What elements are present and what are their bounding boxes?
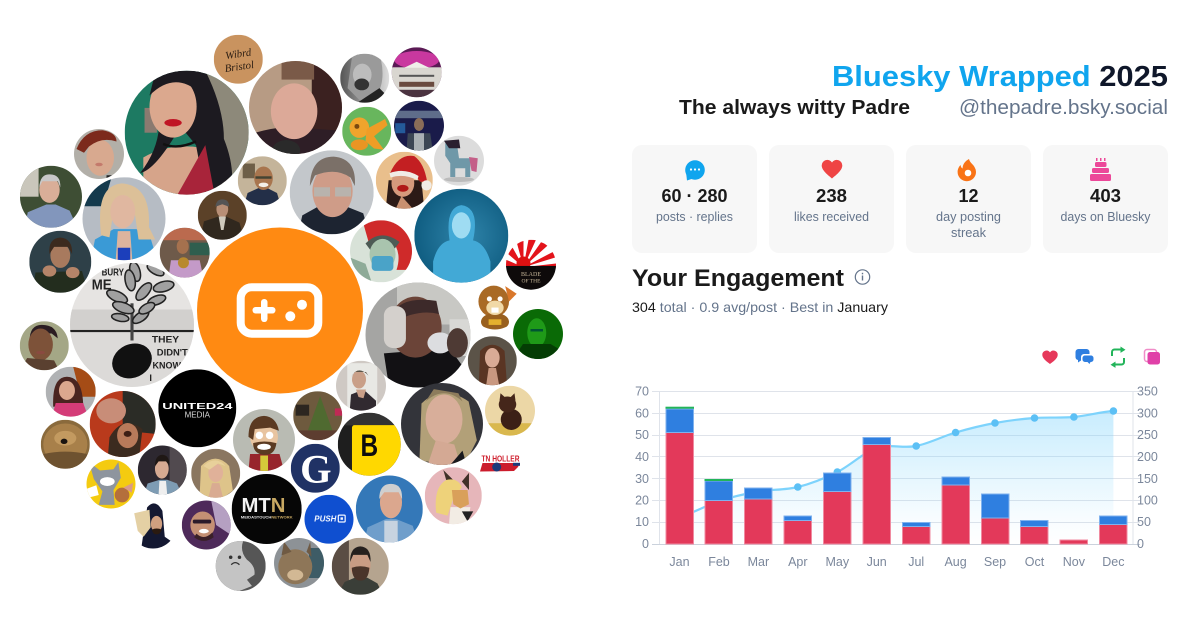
avatar: MeidasTouch Network logo [232, 474, 302, 544]
legend icon: reposts [1110, 346, 1126, 368]
month labels: May [825, 555, 850, 569]
legend icon: quotes [1144, 350, 1160, 364]
month labels: Sep [984, 555, 1006, 569]
right axis labels: 50 [1137, 515, 1151, 529]
avatar: man with headset [366, 282, 470, 388]
center: orange circle with game controller icon [197, 228, 363, 394]
avatar bubble cluster [20, 35, 563, 595]
icon: chat bubble [685, 160, 705, 180]
avatar: United24 Media logo [158, 369, 236, 447]
avatar: Guardian G [291, 444, 340, 493]
avatar: Guardian G: G [300, 447, 332, 492]
avatar: Bury Me potato drawing: THEY [152, 334, 180, 344]
right axis labels [1137, 384, 1158, 551]
avatar: Push Square logo [304, 495, 354, 544]
stat card: posts and replies: posts · replies [656, 210, 733, 224]
cumulative line [680, 411, 1113, 516]
left axis labels: 70 [635, 384, 649, 398]
avatar: blonde woman in blue blazer [82, 177, 166, 260]
avatar: cartoon beaver [478, 286, 517, 330]
cumulative points [794, 407, 1117, 491]
left axis labels: 50 [635, 428, 649, 442]
avatar: man in suit [138, 446, 187, 494]
engagement summary: 304 total · 0.9 avg/post · Best in January [632, 299, 888, 315]
avatar: ghost [216, 541, 266, 591]
gridlines [652, 391, 1140, 544]
avatar: B logo: B [360, 427, 378, 463]
avatar: United24 Media logo: UNITED24 [162, 402, 233, 411]
avatar: Bury Me potato drawing: KNOW [152, 360, 181, 370]
stat card: posting streak: 12 [958, 186, 978, 206]
avatar: red-haired woman [74, 129, 124, 179]
avatar: Wibrd Bristol: Wibrd [225, 46, 253, 62]
left axis labels: 0 [642, 537, 649, 551]
avatar: TN Holler logo [480, 454, 520, 472]
avatar: Tom and Jerry [86, 460, 136, 508]
left axis labels: 10 [635, 515, 649, 529]
display name: The always witty Padre [679, 97, 910, 119]
right axis labels: 100 [1137, 494, 1158, 508]
avatar: White House [392, 47, 442, 97]
avatar: United24 Media logo: MEDIA [185, 410, 210, 420]
avatar: woman with long brown hair [468, 336, 517, 385]
avatar: TN Holler logo: TN HOLLER [482, 454, 520, 464]
avatar: Blade of the rising sun: OF THE [522, 279, 541, 285]
right axis labels: 150 [1137, 472, 1158, 486]
stat card: posts and replies [632, 145, 757, 253]
month labels: Jun [867, 555, 887, 569]
stat card: days on Bluesky [1043, 145, 1168, 253]
avatar: MeidasTouch Network logo: MEIDASTOUCH NETWORK [241, 515, 293, 519]
right axis labels: 250 [1137, 428, 1158, 442]
right axis labels: 200 [1137, 450, 1158, 464]
avatar: shaggy dog [41, 420, 90, 469]
avatar: woman in black top [336, 361, 386, 411]
avatar: Statue of Liberty with mask [350, 220, 412, 282]
avatar: woman with floral top [46, 367, 96, 417]
month labels: Jan [669, 555, 690, 569]
legend icon: likes [1042, 351, 1058, 364]
avatar: blue hooded figure [414, 189, 508, 283]
avatar: MeidasTouch Network logo: MTN [242, 495, 285, 517]
right axis labels: 0 [1137, 537, 1144, 551]
stacked bars: replies [666, 409, 1127, 526]
month labels: Aug [944, 555, 967, 569]
engagement chart [635, 384, 1158, 569]
stat card: posts and replies: 60 · 280 [662, 186, 728, 206]
avatar: man in dark station [394, 101, 444, 151]
month labels: Oct [1025, 555, 1045, 569]
handle: @thepadre.bsky.social [959, 97, 1168, 119]
stat card: likes received: 238 [816, 186, 847, 206]
avatar: cartoon man with beard [233, 409, 295, 471]
left axis labels: 60 [635, 406, 649, 420]
stat card: likes received: likes received [794, 210, 869, 224]
avatar: Blade of the rising sun: BLADE [521, 272, 541, 278]
avatar: Blade of the rising sun [506, 240, 556, 291]
month labels: Dec [1102, 555, 1125, 569]
avatar: Bury Me potato drawing: DIDN'T [157, 347, 188, 357]
icon: info [855, 270, 870, 284]
avatar: man holding collar [29, 231, 91, 293]
avatar: Christmas tree [293, 391, 342, 440]
stat card: posting streak: streak [951, 226, 987, 240]
cumulative area [680, 411, 1113, 544]
stat card: posting streak [906, 145, 1031, 253]
left axis labels: 20 [635, 494, 649, 508]
stacked bars: likes [666, 432, 1127, 544]
avatar: man with glasses [290, 150, 374, 234]
avatar: green man [513, 309, 563, 359]
icon: cake [1090, 158, 1111, 181]
avatar: smiling older man [20, 166, 82, 228]
avatar: B logo [338, 413, 401, 476]
right axis labels: 350 [1137, 384, 1158, 398]
avatar: man in hat [198, 191, 247, 240]
avatar: man with glasses, purple light [182, 500, 231, 550]
icon: heart [822, 160, 842, 178]
avatar: Wibrd Bristol [214, 35, 263, 84]
avatar: bearded man black and white [340, 54, 389, 103]
avatar: blonde woman [401, 383, 483, 465]
avatar: Wibrd Bristol: Bristol [224, 59, 255, 75]
avatar: man with coconut [160, 228, 210, 278]
avatar: Bury Me potato drawing: ME [92, 278, 112, 294]
avatar: painted black cat [485, 386, 535, 436]
month labels: Mar [748, 555, 769, 569]
avatar: blonde woman smiling [191, 449, 240, 498]
month labels: Nov [1063, 555, 1086, 569]
stacked bars: reposts [666, 407, 733, 481]
avatar: cartoon fox girl [425, 467, 482, 524]
avatar: blurry red selfie [90, 391, 156, 457]
stat card: days on Bluesky: 403 [1090, 186, 1121, 206]
right axis labels: 300 [1137, 406, 1158, 420]
avatar: Bury Me potato drawing: BURY [102, 267, 124, 278]
avatar: Bury Me potato drawing [70, 261, 194, 388]
chart legend [1042, 346, 1160, 368]
avatar: Bury Me potato drawing: I [149, 373, 152, 383]
avatar: pixel pony [434, 136, 484, 186]
avatar: Push Square logo: PUSH [314, 514, 337, 523]
month labels [669, 555, 1125, 569]
avatar: bearded man [332, 538, 389, 595]
left axis labels: 40 [635, 450, 649, 464]
icon: flame [958, 159, 976, 181]
avatar: tabby cat [274, 538, 324, 588]
stat card: likes received [769, 145, 894, 253]
avatar: yellow pixel creature [342, 107, 391, 156]
avatar: woman with glasses [20, 321, 69, 370]
legend icon: replies [1076, 349, 1094, 364]
avatar: bald man [249, 61, 342, 161]
left axis labels: 30 [635, 472, 649, 486]
stat card: days on Bluesky: days on Bluesky [1060, 210, 1151, 224]
heading: Your Engagement: Your Engagement [632, 265, 844, 292]
month labels: Jul [908, 555, 924, 569]
avatar: laughing woman in Santa hat [376, 152, 433, 209]
avatar: hooded man with mask [134, 503, 170, 548]
stat card: posting streak: day posting [936, 210, 1001, 224]
title: Bluesky Wrapped 2025 [832, 61, 1168, 93]
avatar: man in blue blazer [356, 476, 423, 542]
avatar: woman with red lips [125, 71, 249, 195]
month labels: Apr [788, 555, 808, 569]
month labels: Feb [708, 555, 730, 569]
avatar: smiling bald man with glasses [238, 156, 287, 205]
left axis labels [635, 384, 649, 551]
